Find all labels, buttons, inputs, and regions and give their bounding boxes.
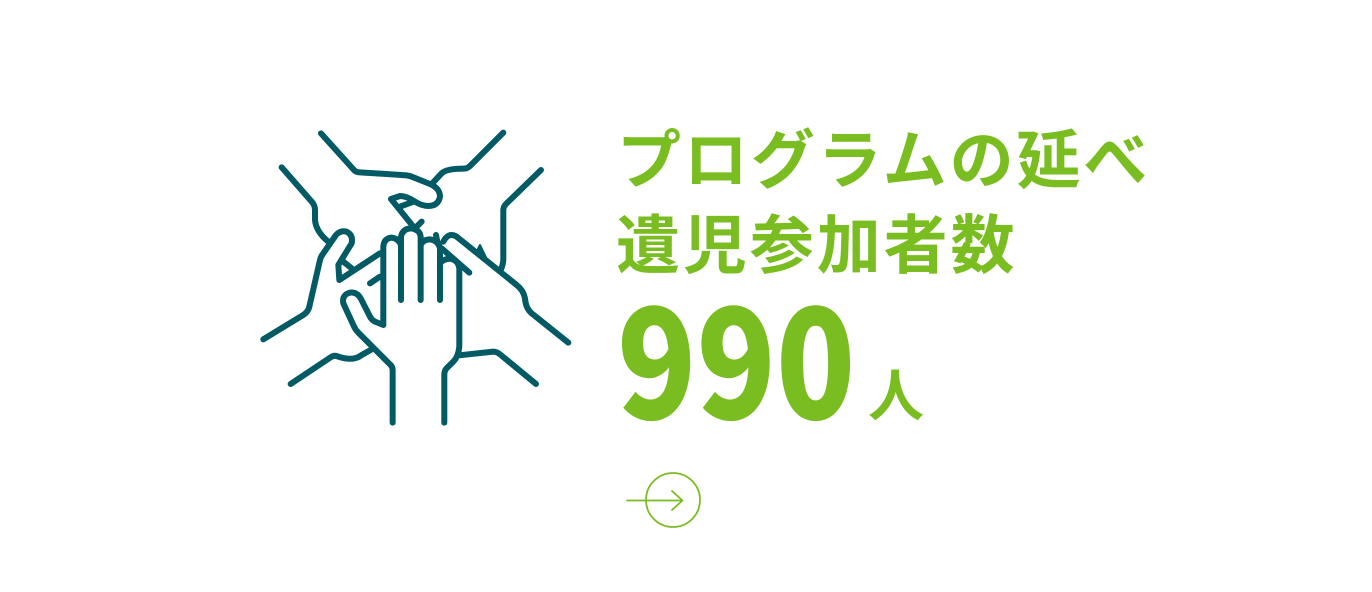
- unit: 人: [868, 352, 924, 433]
- icon: stacked hands: [263, 133, 568, 423]
- left hand: [263, 167, 380, 339]
- right hand: [436, 235, 568, 343]
- heading line 2: 遺児参加者数: [616, 195, 1017, 287]
- centre hand: [343, 228, 459, 423]
- right hand knuckle: [477, 245, 486, 257]
- number: 990: 990: [617, 246, 855, 463]
- bottom arms: [291, 350, 536, 384]
- icon: circled arrow: [627, 473, 700, 527]
- top hand: [321, 133, 503, 228]
- heading line 1: プログラムの延べ: [617, 110, 1150, 202]
- right upper arm: [501, 170, 541, 270]
